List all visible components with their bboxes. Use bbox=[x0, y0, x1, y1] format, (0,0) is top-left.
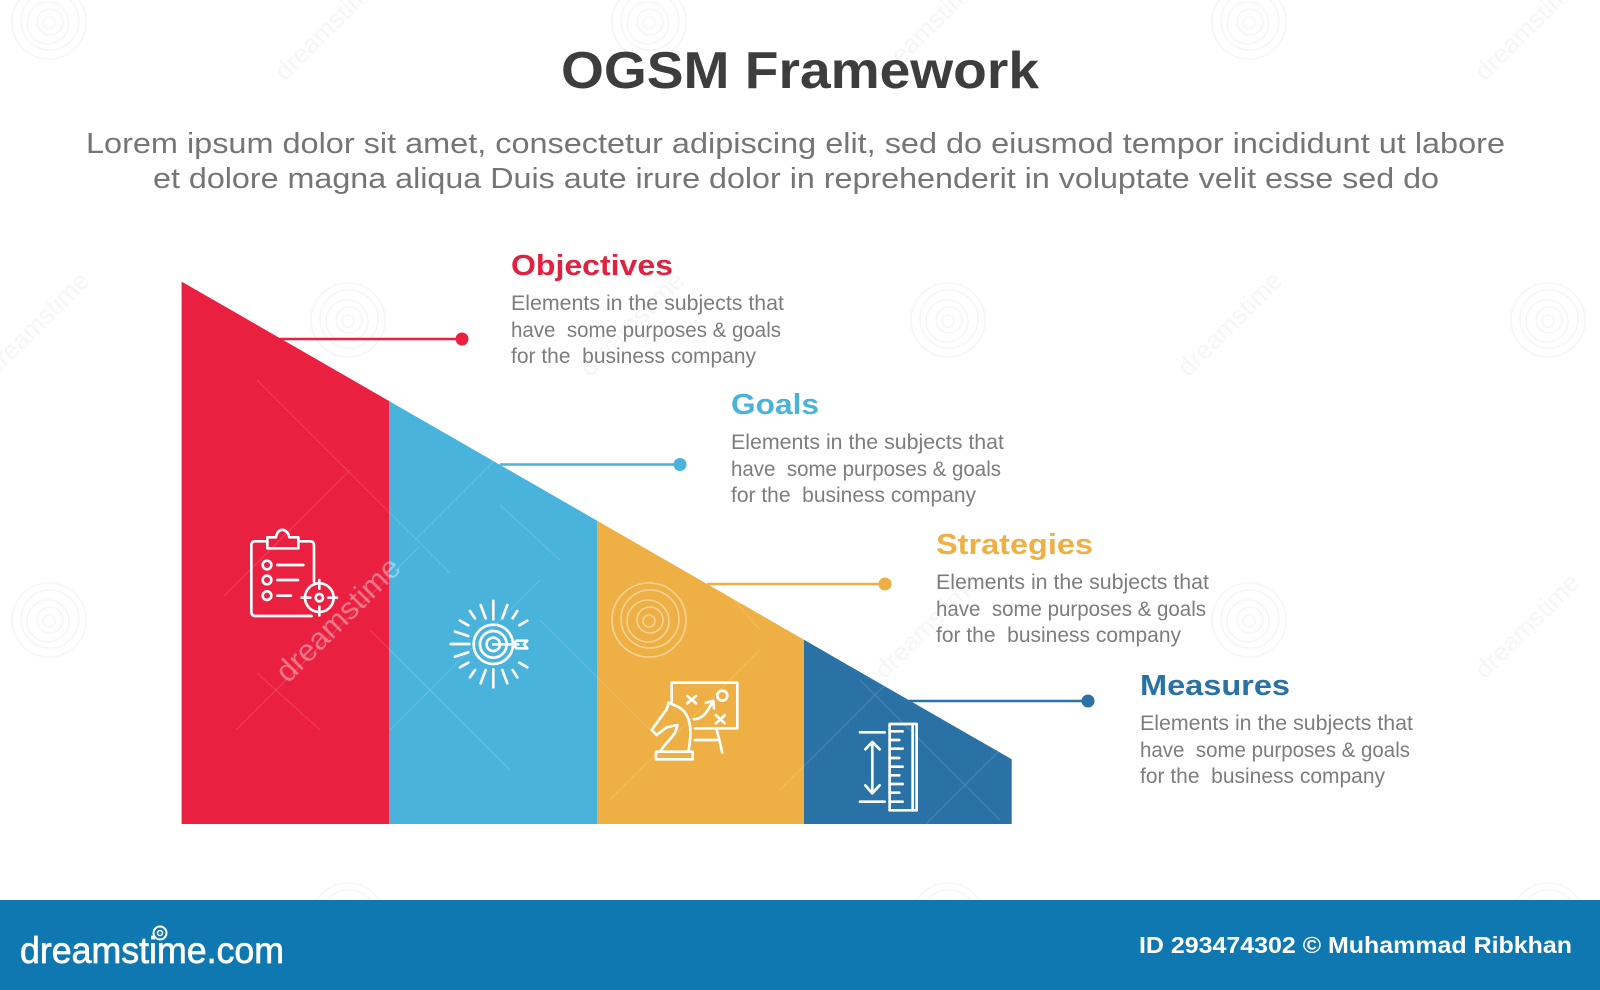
label block: strategies: have some purposes & goals bbox=[936, 598, 1206, 621]
background watermark: dreamstime bbox=[573, 265, 690, 382]
label block: objectives: have some purposes & goals bbox=[511, 319, 781, 342]
icon: ruler and height measure bbox=[860, 724, 917, 810]
label block: measures: Measures bbox=[1140, 670, 1290, 702]
segment: strategies orange bbox=[597, 521, 804, 824]
icon: chess knight and strategy board bbox=[652, 683, 737, 759]
label block: measures: Elements in the subjects that bbox=[1140, 712, 1413, 735]
label block: objectives bbox=[511, 250, 784, 368]
label block: goals: Elements in the subjects that bbox=[731, 431, 1004, 454]
segment: measures dark blue bbox=[804, 640, 1012, 824]
subtitle text bbox=[86, 128, 1505, 195]
subtitle text: Lorem ipsum dolor sit amet, consectetur adipiscing elit, sed do eiusmod tempor incididunt ut labore bbox=[86, 128, 1505, 160]
label block: goals: Goals bbox=[731, 389, 819, 421]
footer band bbox=[0, 900, 1600, 990]
title: OGSM Framework bbox=[561, 42, 1039, 100]
segment: objectives red bbox=[182, 282, 389, 824]
label block: objectives: Elements in the subjects that bbox=[511, 292, 784, 315]
connector: measures bbox=[906, 694, 1094, 708]
icon: target with arrow and rays bbox=[451, 601, 527, 687]
connector: strategies bbox=[707, 578, 892, 590]
label block: goals bbox=[731, 389, 1004, 507]
label block: strategies: Strategies bbox=[936, 529, 1093, 561]
label block: strategies: for the business company bbox=[936, 624, 1181, 647]
panel watermark bbox=[224, 380, 1010, 830]
footer logo: dreamstime.com bbox=[20, 930, 284, 971]
label block: strategies bbox=[936, 529, 1209, 647]
label block: measures bbox=[1140, 670, 1413, 788]
label block: goals: for the business company bbox=[731, 484, 976, 507]
descending wedge chart bbox=[182, 282, 1012, 824]
segment: goals blue bbox=[389, 401, 597, 824]
label block: goals: have some purposes & goals bbox=[731, 458, 1001, 481]
label block: objectives: Objectives bbox=[511, 250, 673, 282]
label block: measures: have some purposes & goals bbox=[1140, 739, 1410, 762]
connector: objectives bbox=[280, 332, 468, 346]
label block: strategies: Elements in the subjects that bbox=[936, 571, 1209, 594]
label block: measures: for the business company bbox=[1140, 765, 1385, 788]
footer credit: ID 293474302 © Muhammad Ribkhan bbox=[1139, 932, 1572, 958]
icon: clipboard with target bbox=[251, 530, 337, 616]
background watermark: dreamstime bbox=[1468, 567, 1585, 684]
background watermark: dreamstime bbox=[868, 567, 985, 684]
label block: objectives: for the business company bbox=[511, 345, 756, 368]
text: dreamstime bbox=[268, 550, 407, 689]
connector: goals bbox=[500, 458, 686, 471]
background watermark: dreamstime bbox=[1171, 265, 1288, 382]
subtitle text: et dolore magna aliqua Duis aute irure dolor in reprehenderit in voluptate velit esse sed do bbox=[153, 163, 1439, 195]
